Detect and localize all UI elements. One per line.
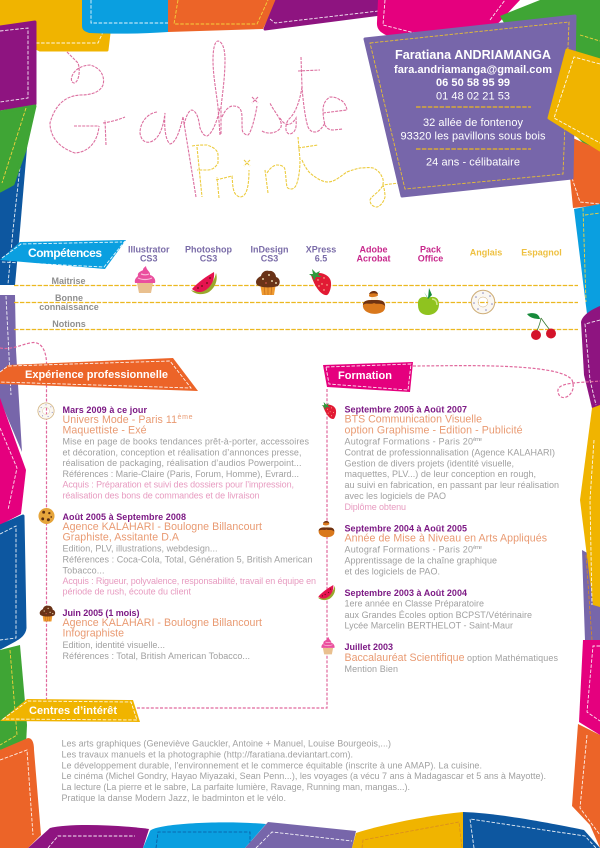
patch: bottom violet [245, 822, 356, 848]
skill: Photoshop: CS3 [200, 254, 217, 264]
banner: Expérience professionnelle: Expérience professionnelle [25, 369, 168, 381]
education 1: BTS: Diplôme obtenu [344, 502, 406, 512]
patch: right magenta [579, 640, 600, 735]
education 1: BTS: Contrat de professionnalisation (Agence KALAHARI) [344, 447, 555, 457]
experience 3: Agence Kalahari infographiste [40, 606, 262, 661]
experience 1: Univers Mode: Univers Mode - Paris 11 [62, 414, 177, 426]
education 4: Baccalauréat: Mention Bien [344, 664, 398, 674]
icon: strawberry [322, 402, 336, 419]
experience 2: Agence Kalahari graphiste: Tobacco... [62, 566, 104, 576]
skill: Adobe Acrobat: Acrobat [356, 254, 391, 264]
interests text: La lecture (La pierre et le sabre, La parfaite lumière, Ravage, Running man, mangas...). [62, 782, 410, 792]
education 1: BTS: ème [473, 437, 482, 443]
banner: Centres d'intérêt [0, 699, 140, 722]
education 3: Classe préparatoire: 1ere année en Classe Préparatoire [344, 598, 484, 608]
icon: watermelon [318, 585, 335, 600]
skill: Adobe Acrobat: Adobe [360, 244, 388, 254]
contact name: Faratiana ANDRIAMANGA [395, 48, 551, 62]
patch: right orange lower [572, 724, 600, 848]
experience 3: Agence Kalahari infographiste: Edition, identité visuelle... [62, 640, 165, 650]
education 3: Classe préparatoire [318, 585, 532, 631]
patch: left violet [0, 295, 22, 452]
timeline rails [0, 343, 600, 708]
experience 2: Agence Kalahari graphiste: Août 2005 à Septembre 2008 [62, 512, 186, 522]
experience 1: Univers Mode: Références : Marie-Claire (Paris, Forum, Homme), Evrard... [62, 469, 299, 479]
banner: Expérience professionnelle [0, 358, 198, 391]
education 4: Baccalauréat: Juillet 2003 [344, 642, 393, 652]
experience 1: Univers Mode: Maquettiste - Exé [62, 424, 147, 436]
banner: Formation: Formation [338, 370, 392, 382]
interests text: Pratique la danse Modern Jazz, le badminton et le vélo. [62, 793, 286, 803]
patch: bottom yellow [352, 812, 463, 848]
interests text: Les arts graphiques (Geneviève Gauckler, Antoine + Manuel, Louise Bourgeois,...) [62, 739, 391, 749]
education 1: BTS: Autograf Formations - Paris 20 [344, 437, 473, 447]
education 4: Baccalauréat [321, 637, 558, 674]
education 2: Mise à Niveau: Apprentissage de la chaîne graphique [344, 556, 497, 566]
skill: XPress: 6.5 [315, 254, 327, 264]
education 2: Mise à Niveau: Autograf Formations - Paris 20 [344, 545, 473, 555]
experience 1: Univers Mode: réalisation de packaging, réalisation d’audios Powerpoint... [62, 458, 302, 468]
level labels: Notions [52, 319, 86, 329]
experience 3: Agence Kalahari infographiste: Références : Total, British American Tobacco... [62, 651, 250, 661]
experience 2: Agence Kalahari graphiste: Graphiste, Assitante D.A [62, 532, 180, 544]
experience 1: Univers Mode: ème [178, 414, 193, 421]
age and status: 24 ans - célibataire [426, 156, 520, 168]
education 4: Baccalauréat: Baccalauréat Scientifique [344, 652, 465, 664]
patch: left orange lower [0, 738, 41, 848]
patch: top magenta [377, 0, 520, 42]
experience 2: Agence Kalahari graphiste: Edition, PLV, illustrations, webdesign... [62, 544, 218, 554]
banner: Centres d'intérêt: Centres d’intérêt [29, 705, 117, 717]
icon: donut [39, 404, 53, 417]
experience 3: Agence Kalahari infographiste: Juin 2005 (1 mois) [62, 608, 140, 618]
icon: cookie [38, 508, 55, 524]
education 1: BTS: Gestion de divers projets (identité visuelle, [344, 458, 514, 468]
title: Print [192, 137, 407, 207]
icon: cupcake [321, 637, 335, 654]
patch: top purple [265, 0, 396, 29]
experience 1: Univers Mode: réalisation des bons de commandes et de livraison [62, 490, 260, 500]
skill: Illustrator: Illustrator [128, 244, 170, 254]
mobile phone: 06 50 58 95 99 [436, 77, 510, 89]
education 3: Classe préparatoire: Lycée Marcelin BERTHELOT - Saint-Maur [344, 621, 513, 631]
skill: Photoshop: Photoshop [185, 244, 232, 254]
level labels: connaissance [39, 302, 99, 312]
patch: top orange [168, 0, 277, 32]
patch: top yellow [0, 0, 113, 50]
title: Graphiste [50, 41, 347, 197]
interests text [62, 739, 546, 803]
banner: Compétences: Compétences [28, 246, 102, 260]
address: 32 allée de fontenoy [423, 117, 524, 129]
experience 2: Agence Kalahari graphiste: Références : Coca-Cola, Total, Génération 5, British American [62, 555, 312, 565]
contact email: fara.andriamanga@gmail.com [394, 64, 552, 76]
experience 1: Univers Mode [39, 404, 309, 500]
patch: bottom dark blue [463, 812, 600, 848]
level labels [39, 276, 99, 329]
education 4: Baccalauréat: option Mathématiques [467, 653, 558, 663]
skill: Pack Office: Pack [420, 244, 442, 254]
education 1: BTS: maquettes, PLV...) de leur conception en rough, [344, 469, 536, 479]
experience 3: Agence Kalahari infographiste: Infographiste [62, 628, 124, 640]
skill: XPress: XPress [306, 244, 336, 254]
banner: Formation [323, 362, 413, 392]
skill: InDesign [250, 244, 289, 295]
patch: right violet [582, 550, 600, 641]
education 1: BTS: Septembre 2005 à Août 2007 [344, 404, 467, 414]
skill: InDesign: InDesign [250, 244, 289, 254]
patch: right yellow lower [580, 405, 600, 607]
patch: bottom blue [143, 822, 266, 848]
experience 2: Agence Kalahari graphiste [38, 508, 316, 597]
patch: left purple [0, 22, 35, 109]
skill: Pack Office [418, 244, 443, 315]
level labels: Bonne [55, 293, 83, 303]
education 3: Classe préparatoire: aux Grandes Écoles option BCPST/Vétérinaire [344, 610, 532, 620]
experience 1: Univers Mode: et décoration, conception et réalisation d’annonces presse, [62, 448, 302, 458]
level labels: Maitrise [51, 276, 86, 286]
education 3: Classe préparatoire: Septembre 2003 à Août 2004 [344, 588, 467, 598]
address: 93320 les pavillons sous bois [400, 130, 546, 142]
patch: left green lower [0, 645, 27, 750]
patch: right yellow over card [549, 50, 600, 150]
skill: Illustrator [128, 244, 170, 293]
patch: left green [0, 106, 35, 191]
interests text: Le développement durable, l’environnement et le commerce équitable (inscrite à une AMAP). La cuisine. [62, 760, 482, 770]
education 1: BTS [322, 402, 559, 512]
patch: right orange [566, 135, 600, 208]
education 2: Mise à Niveau: Septembre 2004 à Août 2005 [344, 523, 467, 533]
banner: Compétences [0, 240, 126, 269]
skills section [0, 240, 578, 340]
patch: right purple [581, 306, 600, 408]
experience 1: Univers Mode: Mars 2009 à ce jour [62, 405, 147, 415]
experience 1: Univers Mode: Mise en page de books tendances prêt-à-porter, accessoires [62, 437, 310, 447]
experience 2: Agence Kalahari graphiste: Acquis : Rigueur, polyvalence, responsabilité, travail en équipe en [62, 576, 316, 586]
skill: Photoshop [185, 244, 232, 294]
skill: Illustrator: CS3 [140, 254, 157, 264]
education column [318, 402, 559, 674]
patch: dark blue left [0, 136, 28, 285]
patch: right blue [574, 204, 600, 314]
patch: top blue [82, 0, 168, 34]
skill: Adobe Acrobat [356, 244, 391, 314]
education 1: BTS: option Graphisme - Edition - Publicité [344, 425, 523, 437]
skill: Espagnol: Espagnol [521, 248, 562, 258]
education 2: Mise à Niveau: et des logiciels de PAO. [344, 567, 440, 577]
landline phone: 01 48 02 21 53 [436, 90, 510, 102]
icon: choux pastry [319, 521, 334, 537]
skill: Anglais [470, 248, 502, 311]
experience column [38, 404, 316, 661]
address [400, 117, 546, 142]
contact card [365, 16, 575, 196]
patch: bottom purple [28, 825, 149, 848]
skill: Espagnol [521, 248, 562, 340]
experience 2: Agence Kalahari graphiste: Agence KALAHARI - Boulogne Billancourt [62, 521, 262, 533]
icon: muffin [40, 606, 55, 622]
patch: left dark blue [0, 516, 25, 648]
education 2: Mise à Niveau: Année de Mise à Niveau en Arts Appliqués [344, 533, 547, 545]
education 1: BTS: BTS Communication Visuelle [344, 414, 482, 426]
interests text: Le cinéma (Michel Gondry, Hayao Miyazaki, Sean Penn...), les voyages (a vécu 7 ans à Madagascar et 5 ans à Mayotte). [62, 771, 546, 781]
patch: left magenta [0, 398, 26, 525]
experience 2: Agence Kalahari graphiste: période de rush, écoute du client [62, 587, 191, 597]
education 1: BTS: au suivi en fabrication, en passant par leur réalisation [344, 480, 559, 490]
skill: Anglais: Anglais [470, 248, 502, 258]
skill: XPress [306, 244, 336, 295]
education 2: Mise à Niveau [319, 521, 547, 577]
patch: top right green [500, 0, 600, 160]
skill: Pack Office: Office [418, 254, 443, 264]
education 2: Mise à Niveau: ème [473, 545, 482, 551]
education 1: BTS: avec les logiciels de PAO [344, 491, 446, 501]
interests text: Les travaux manuels et la photographie (http://faratiana.deviantart.com). [62, 750, 353, 760]
experience 3: Agence Kalahari infographiste: Agence KALAHARI - Boulogne Billancourt [62, 617, 262, 629]
skill: InDesign: CS3 [261, 254, 278, 264]
experience 1: Univers Mode: Acquis : Préparation et suivi des dossiers pour l’impression, [62, 480, 294, 490]
